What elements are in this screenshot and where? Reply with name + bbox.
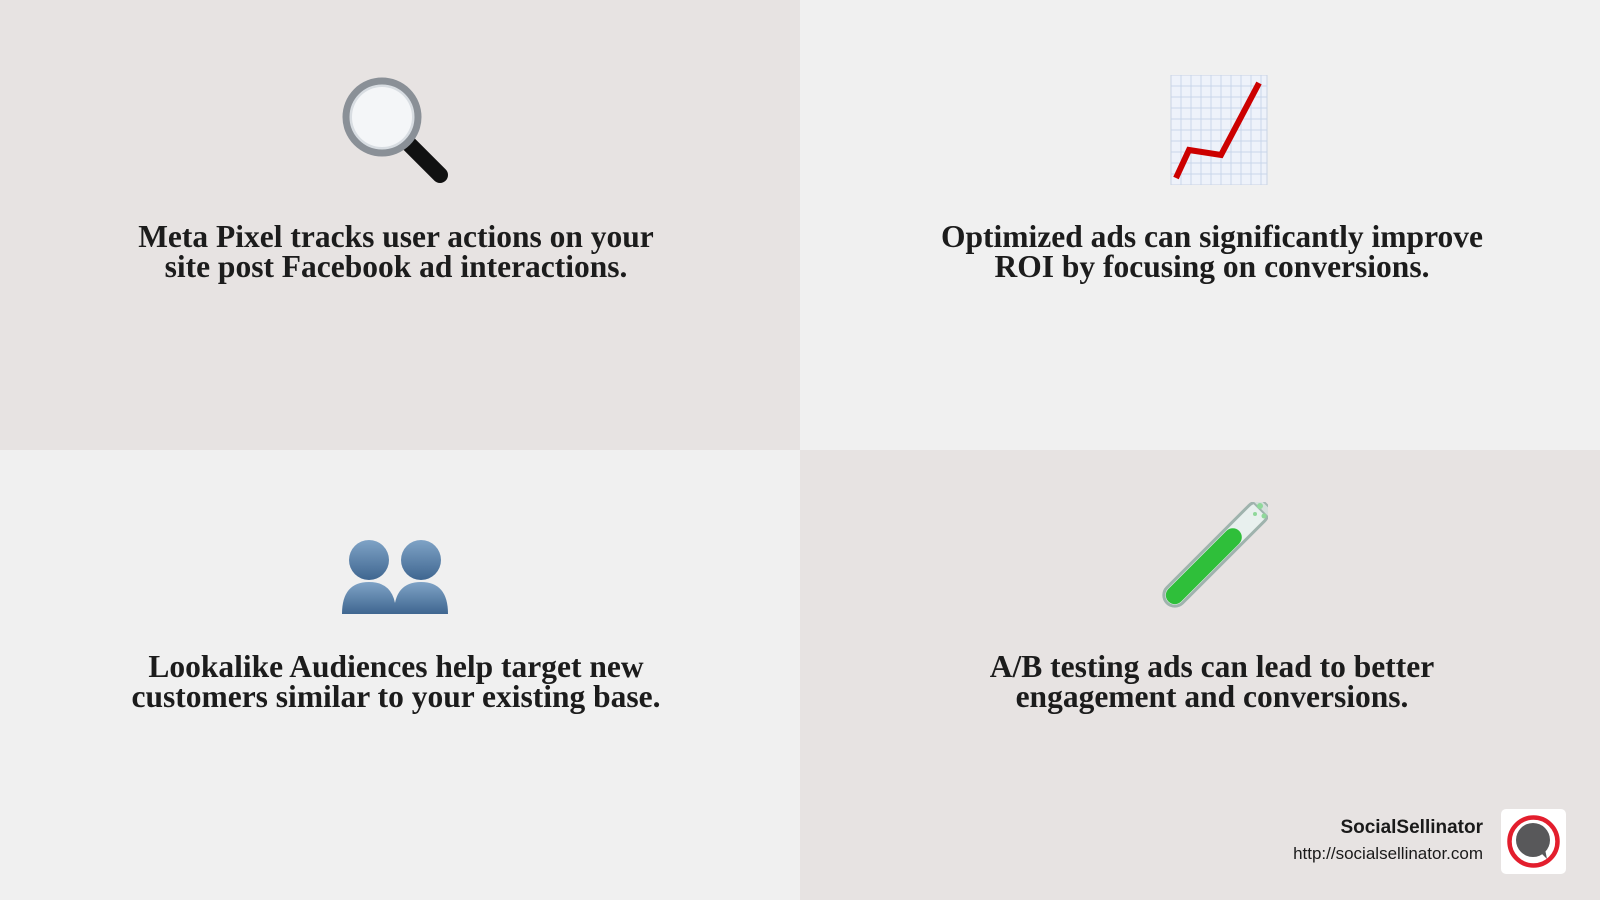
text: lookalike audiences xyxy=(131,649,661,714)
brand url: http://socialsellinator.com xyxy=(1293,844,1483,863)
brand block xyxy=(1293,809,1566,874)
icon: chart xyxy=(1170,75,1268,185)
icon: people xyxy=(342,540,448,614)
text: meta pixel xyxy=(138,219,654,284)
text: lookalike audiences: Lookalike Audiences help target new xyxy=(148,649,644,684)
panel: a/b testing xyxy=(800,450,1600,900)
text: meta pixel: site post Facebook ad interactions. xyxy=(165,249,627,284)
text: lookalike audiences: customers similar to your existing base. xyxy=(131,679,661,714)
brand name: SocialSellinator xyxy=(1340,817,1483,838)
text: optimized ads xyxy=(941,219,1483,284)
text: meta pixel: Meta Pixel tracks user actions on your xyxy=(138,219,654,254)
icon: magnifying glass xyxy=(342,78,448,183)
panel: lookalike audiences xyxy=(0,450,800,900)
panel: meta pixel xyxy=(0,0,800,450)
text: optimized ads: ROI by focusing on conversions. xyxy=(995,249,1429,284)
text: optimized ads: Optimized ads can significantly improve xyxy=(941,219,1483,254)
text: a/b testing: engagement and conversions. xyxy=(1016,679,1408,714)
text: a/b testing xyxy=(990,649,1434,714)
icon: test tube xyxy=(1162,502,1268,608)
panel: optimized ads xyxy=(800,0,1600,450)
logo xyxy=(1501,809,1566,874)
text: a/b testing: A/B testing ads can lead to better xyxy=(990,649,1434,684)
